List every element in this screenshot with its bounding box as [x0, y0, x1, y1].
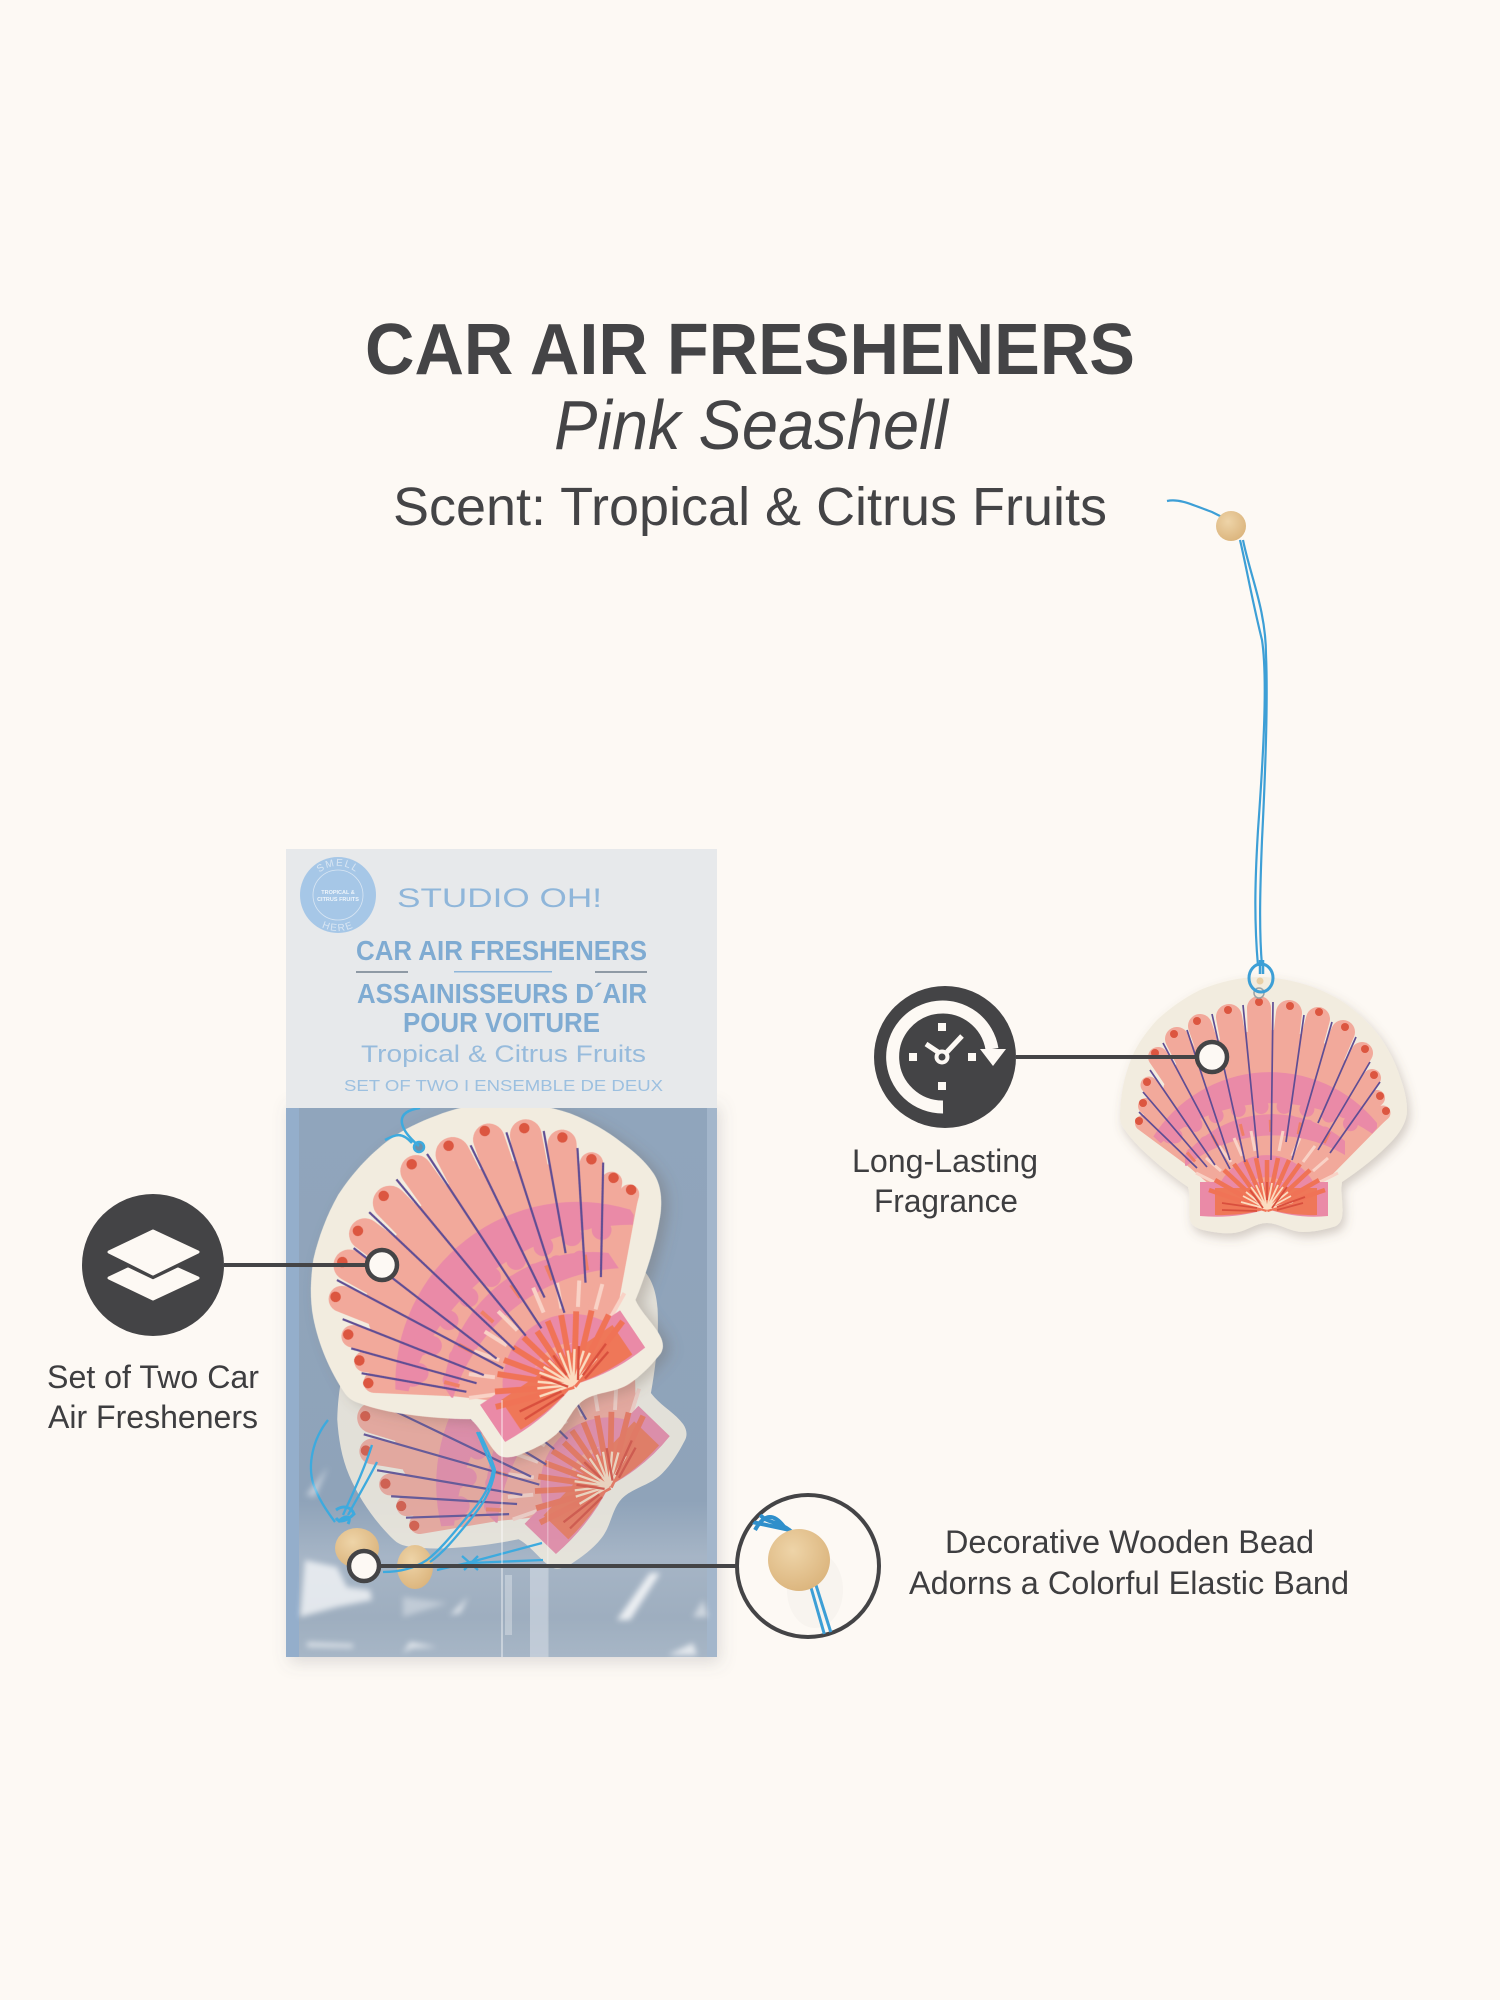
leader line [224, 1263, 366, 1267]
callout: long-lasting fragrance [852, 986, 1227, 1219]
front shell [241, 1028, 744, 1520]
plastic highlights [300, 1400, 708, 1657]
marker dot [1197, 1042, 1227, 1072]
product: hanging shell air freshener [1120, 500, 1407, 1233]
label: Decorative Wooden Bead [945, 1524, 1314, 1560]
inset: bead closeup [737, 1495, 879, 1640]
scent on card: Tropical & Citrus Fruits [361, 1041, 646, 1068]
title block [365, 310, 1135, 537]
back shell [265, 1151, 756, 1643]
label: Adorns a Colorful Elastic Band [909, 1565, 1349, 1601]
header card [286, 849, 717, 1108]
marker dot [349, 1551, 379, 1581]
wooden beads in bag [335, 1528, 433, 1589]
french product name line 1: ASSAINISSEURS D´AIR [357, 978, 647, 1009]
marker dot [367, 1250, 397, 1280]
smell here sticker: CITRUS FRUITS [317, 897, 359, 903]
english product name: CAR AIR FRESHENERS [356, 935, 647, 966]
hanging elastic string [1167, 500, 1267, 966]
label: Long-Lasting [852, 1143, 1038, 1179]
scent line: Scent: Tropical & Citrus Fruits [393, 477, 1107, 537]
brand logo: STUDIO OH! [397, 883, 602, 913]
label: Fragrance [874, 1183, 1018, 1219]
smell here sticker: HERE [322, 921, 352, 932]
strings inside bag [311, 1420, 543, 1572]
callout: wooden bead [349, 1495, 1349, 1640]
label [852, 1143, 1038, 1219]
divider rules [356, 971, 647, 973]
smell here sticker [300, 857, 376, 933]
icon: stacked layers [82, 1194, 224, 1336]
set of two: SET OF TWO I ENSEMBLE DE DEUX [344, 1078, 663, 1095]
heading: Car Air Fresheners: CAR AIR FRESHENERS [365, 310, 1135, 390]
callout: set of two [47, 1194, 397, 1435]
subheading: Pink Seashell: Pink Seashell [554, 386, 950, 464]
smell here sticker: SMELL [317, 858, 356, 872]
hole and loop [1249, 960, 1273, 998]
label: Air Fresheners [48, 1399, 258, 1435]
icon: clock with arrow [874, 986, 1016, 1128]
french product name line 2: POUR VOITURE [403, 1007, 600, 1038]
label [909, 1524, 1349, 1601]
plastic bag [286, 1100, 717, 1657]
label [47, 1359, 259, 1435]
product: packaged set in bag [284, 849, 724, 1668]
leader line [1016, 1055, 1196, 1059]
smell here sticker: TROPICAL & [321, 890, 355, 896]
leader line [380, 1564, 737, 1568]
label: Set of Two Car [47, 1359, 259, 1395]
shell tag [1120, 977, 1407, 1233]
wooden bead [1216, 511, 1246, 541]
front shell hole and string [385, 1108, 424, 1152]
